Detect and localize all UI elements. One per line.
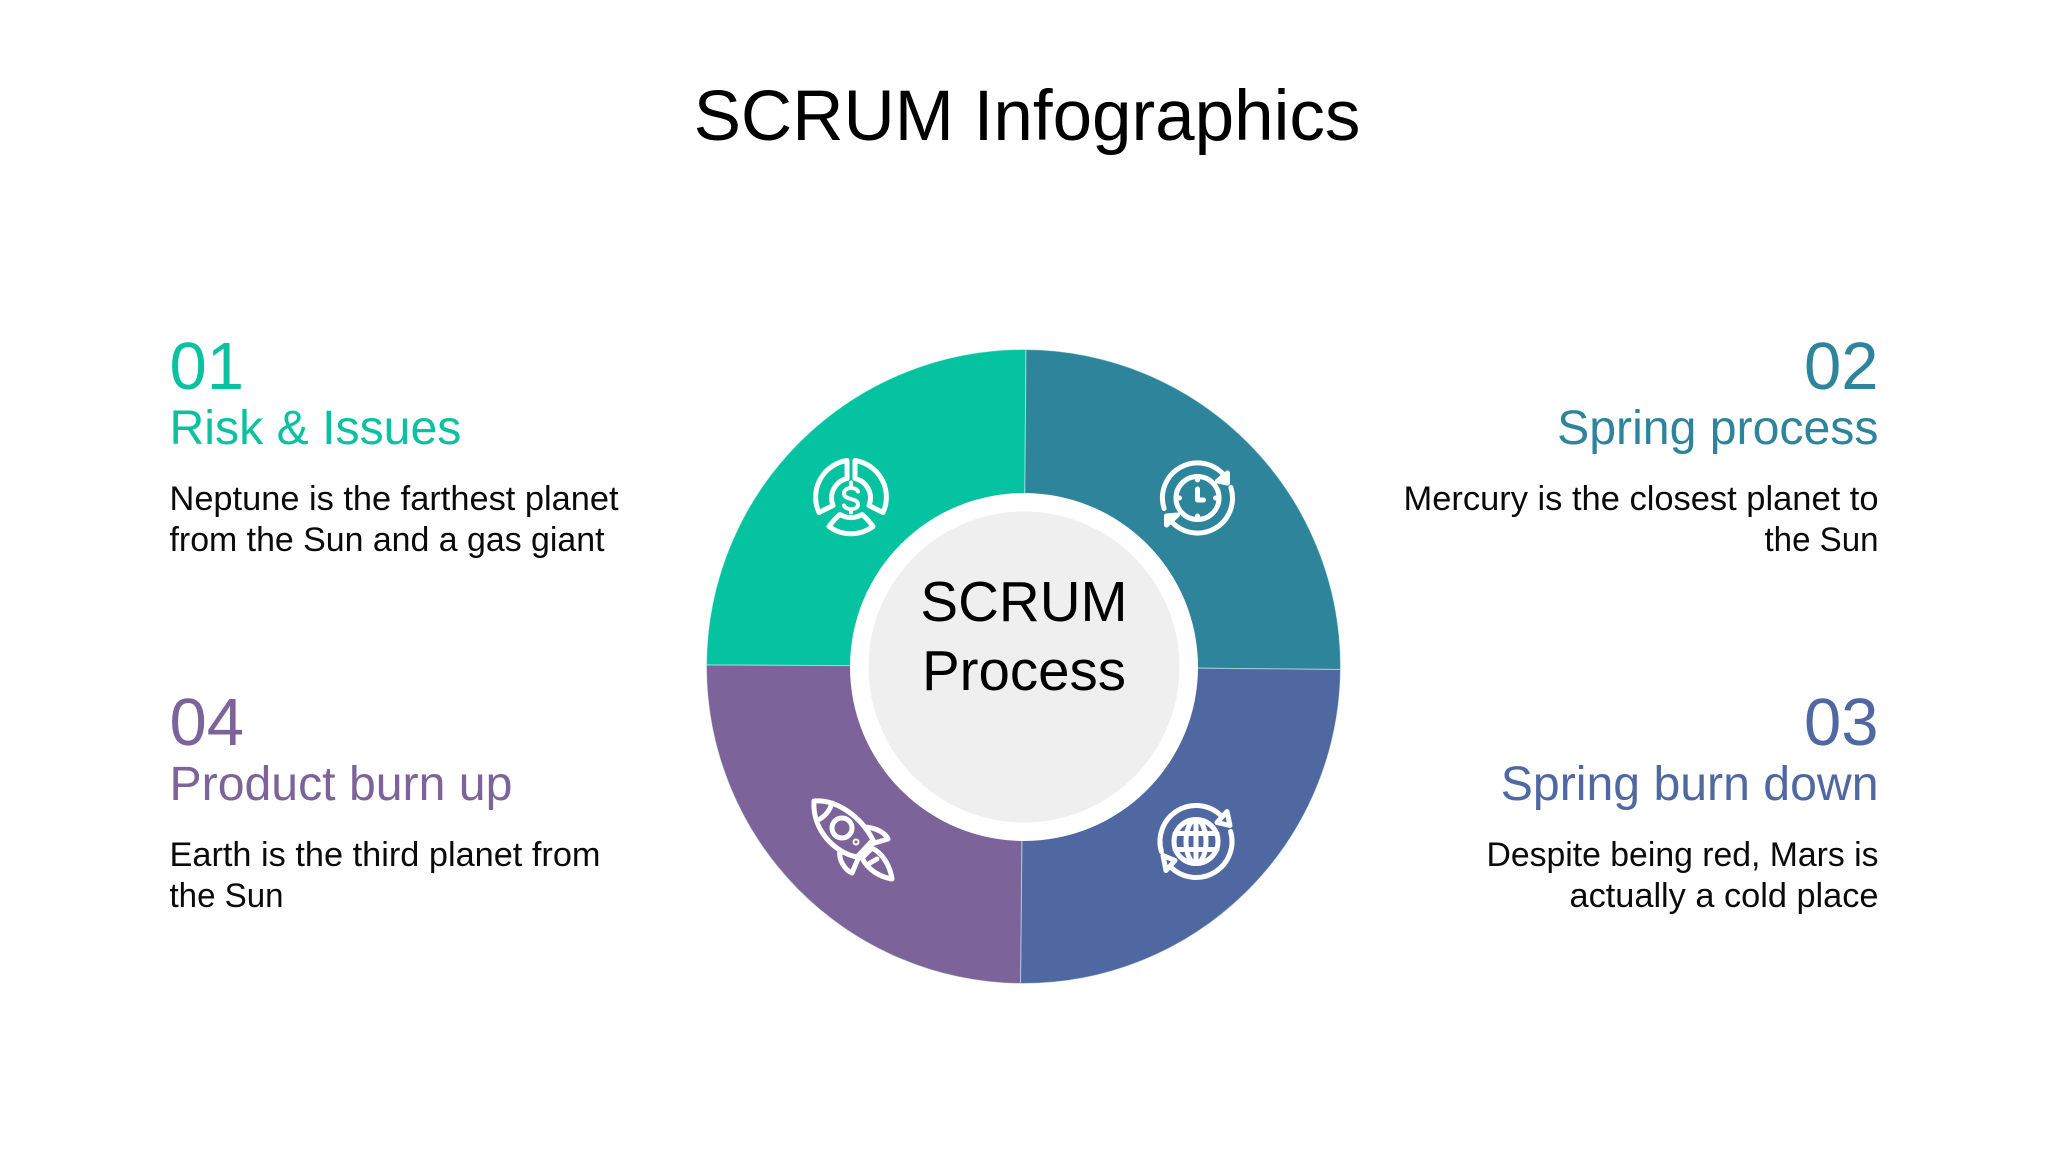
number 04: 04 xyxy=(170,685,244,760)
text: Neptune description: Neptune is the farthest planet xyxy=(170,480,619,518)
donut chart xyxy=(706,349,1341,984)
heading: Risk & Issues: Risk & Issues xyxy=(170,401,461,455)
center label: Process xyxy=(922,639,1126,702)
segment: teal xyxy=(706,349,1026,666)
icon: clock cycle xyxy=(1162,463,1233,533)
heading: Product burn up: Product burn up xyxy=(170,757,512,811)
segment: blue xyxy=(1020,666,1340,984)
panel: 04 Product burn up xyxy=(170,685,600,915)
number 03: 03 xyxy=(1804,685,1878,760)
center gray circle xyxy=(868,512,1180,822)
inner white ring xyxy=(850,493,1198,841)
panel: 02 Spring process xyxy=(1404,329,1878,559)
text: Earth description: Earth is the third planet from xyxy=(170,836,600,874)
text: Mars description: actually a cold place xyxy=(1570,877,1878,915)
text: Mercury description: Mercury is the closest planet to xyxy=(1404,480,1878,518)
text: Mercury description: the Sun xyxy=(1764,521,1878,559)
text: Earth description xyxy=(170,836,600,915)
text: Mars description: Despite being red, Mars is xyxy=(1486,836,1878,874)
text: Mercury description xyxy=(1404,480,1878,559)
center label: SCRUM xyxy=(920,570,1128,633)
icon: rocket xyxy=(814,801,892,879)
text: Neptune description xyxy=(170,480,619,559)
text: Mars description xyxy=(1486,836,1878,915)
panel: 03 Spring burn down xyxy=(1486,685,1878,915)
heading: Spring process: Spring process xyxy=(1557,401,1878,455)
icon: dollar target xyxy=(816,460,886,534)
icon: globe cycle xyxy=(1160,806,1232,877)
text: Neptune description: from the Sun and a gas giant xyxy=(170,521,605,559)
segment: purple xyxy=(706,665,1024,984)
title: SCRUM Infographics xyxy=(694,77,1360,156)
number 01: 01 xyxy=(170,329,244,404)
segment: blue-teal xyxy=(1024,350,1341,670)
text: Earth description: the Sun xyxy=(170,877,284,915)
number 02: 02 xyxy=(1804,329,1878,404)
panel: 01 Risk & Issues xyxy=(170,329,619,559)
heading: Spring burn down: Spring burn down xyxy=(1501,757,1878,811)
